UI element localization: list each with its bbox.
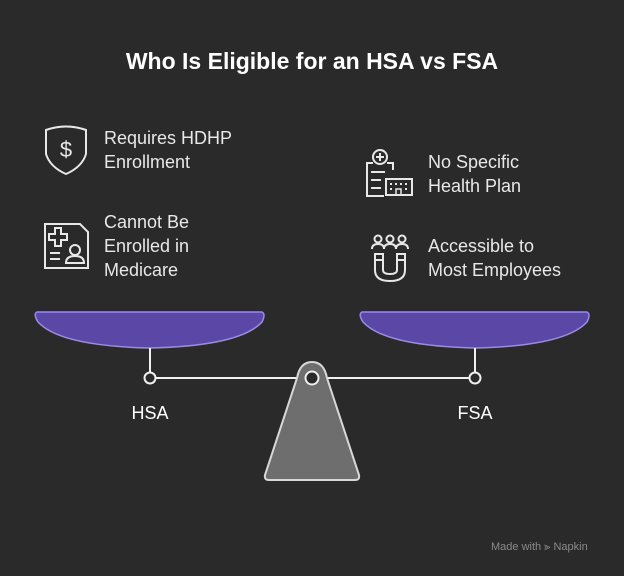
text: no specific plan: Health Plan: [428, 176, 521, 196]
fulcrum: [265, 362, 359, 480]
text: accessible: Accessible to: [428, 236, 534, 256]
text: requires HDHP: Enrollment: [104, 152, 190, 172]
text: cannot be enrolled: [104, 212, 189, 280]
text: no specific plan: No Specific: [428, 152, 519, 172]
label: FSA: FSA: [457, 403, 492, 423]
pan: FSA: [360, 312, 589, 348]
text: accessible: Most Employees: [428, 260, 561, 280]
text: requires HDHP: [104, 128, 232, 172]
text: requires HDHP: Requires HDHP: [104, 128, 232, 148]
icon: shield dollar: $: [60, 137, 72, 162]
icon: medical card: [44, 223, 89, 269]
text: cannot be enrolled: Enrolled in: [104, 236, 189, 256]
text: cannot be enrolled: Medicare: [104, 260, 178, 280]
label: HSA: HSA: [131, 403, 168, 423]
text: cannot be enrolled: Cannot Be: [104, 212, 189, 232]
icon: shield dollar: [45, 126, 87, 176]
text: accessible: [428, 236, 561, 280]
title: Who Is Eligible for an HSA vs FSA: [126, 48, 498, 74]
watermark: Made with ⫸ Napkin: [491, 541, 588, 553]
text: no specific plan: [428, 152, 521, 196]
icon: health plan: [366, 149, 413, 197]
pan: HSA: [35, 312, 264, 348]
icon: magnet people: [371, 234, 409, 282]
beam: [144, 348, 480, 480]
